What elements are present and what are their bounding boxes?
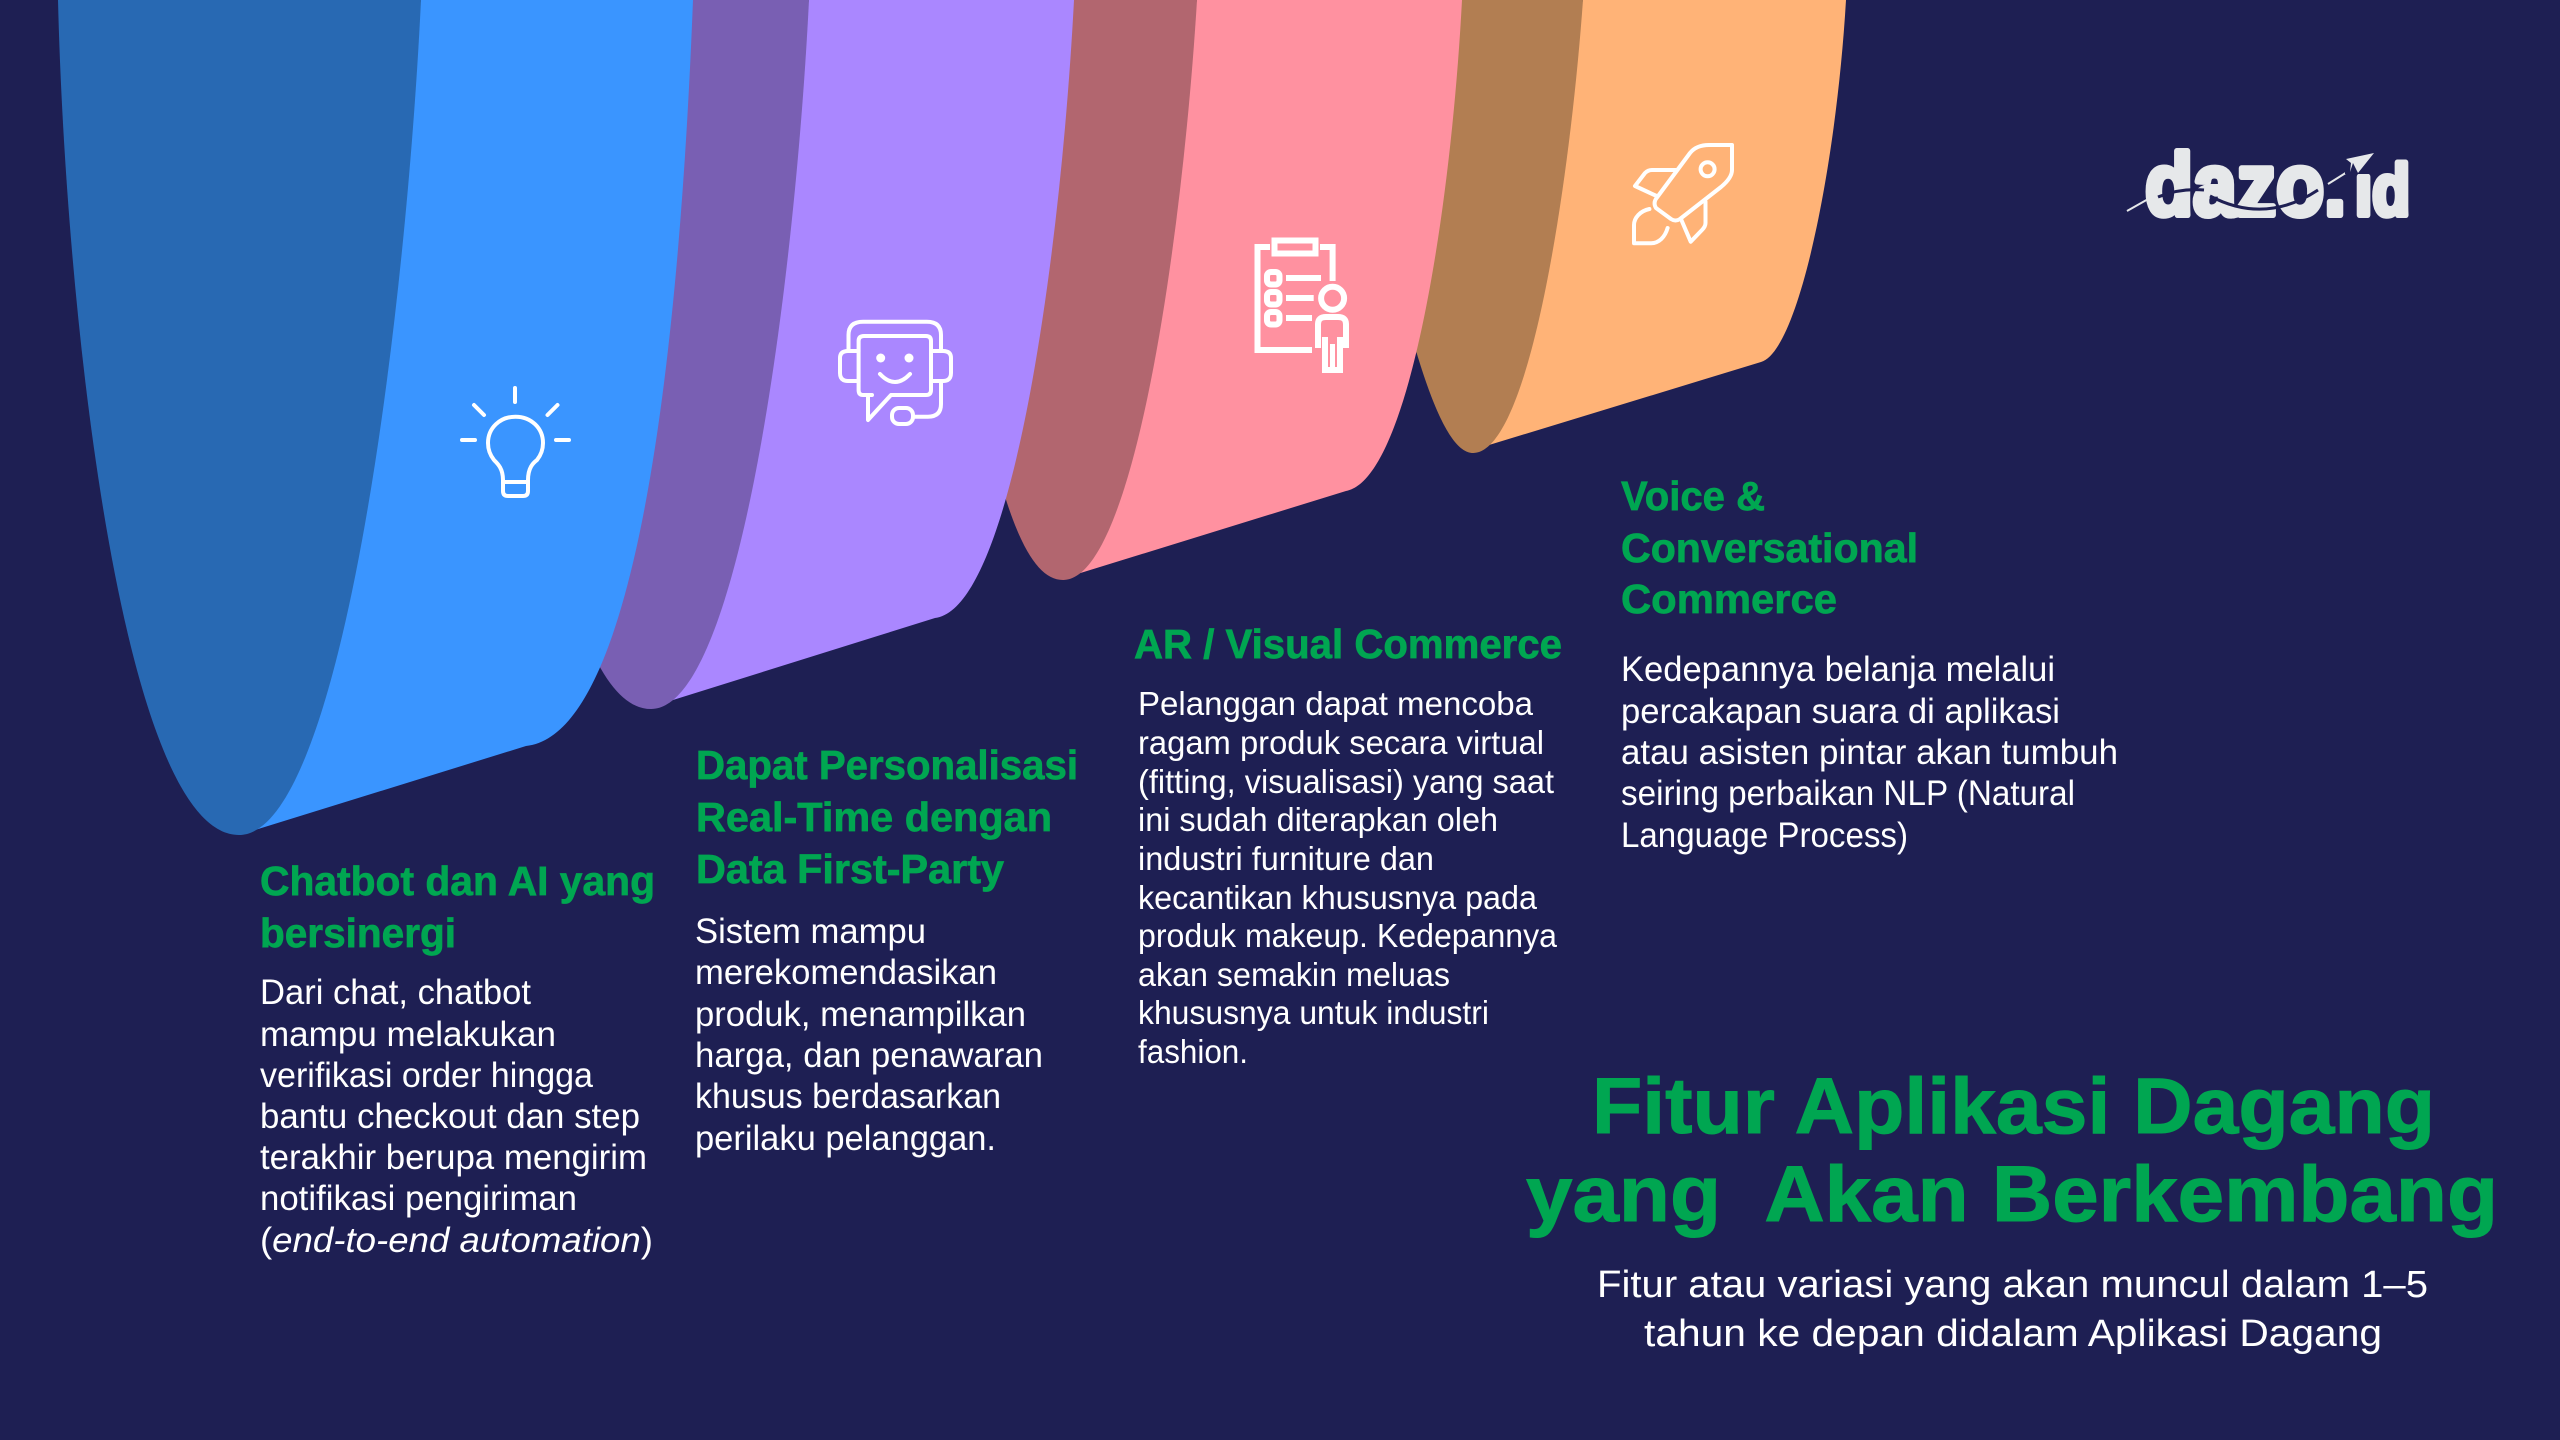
icon: rocket — [1634, 145, 1732, 243]
text block: personalisasi — [695, 742, 1078, 1158]
body: personalisasi: perilaku pelanggan. — [695, 1119, 996, 1158]
body: personalisasi: Sistem mampu — [695, 912, 926, 951]
text block: AR visual commerce — [1134, 621, 1562, 1070]
heading: voice commerce — [1621, 473, 1918, 622]
body: chatbot: verifikasi order hingga — [260, 1056, 594, 1095]
body: voice commerce: percakapan suara di aplikasi — [1621, 692, 2060, 731]
body: AR visual commerce: ini sudah diterapkan oleh — [1138, 801, 1498, 838]
subtitle: tahun ke depan didalam Aplikasi Dagang — [1644, 1313, 2382, 1355]
body: personalisasi: khusus berdasarkan — [695, 1077, 1001, 1116]
heading: personalisasi — [696, 742, 1078, 892]
body: chatbot: mampu melakukan — [260, 1015, 556, 1054]
heading: personalisasi: Data First-Party — [696, 846, 1004, 892]
body: AR visual commerce — [1138, 685, 1558, 1070]
body: chatbot — [260, 973, 653, 1260]
title: Fitur Aplikasi Dagang — [1592, 1061, 2435, 1150]
logo: dazo.id: dazo. — [2145, 135, 2346, 234]
text block: voice commerce — [1621, 473, 2118, 855]
heading: voice commerce: Commerce — [1621, 576, 1837, 622]
body: AR visual commerce: akan semakin meluas — [1138, 956, 1450, 993]
heading: personalisasi: Real-Time dengan — [696, 794, 1052, 840]
heading: chatbot: bersinergi — [260, 910, 456, 956]
heading: chatbot — [260, 858, 655, 956]
icon: chatbot with headset — [840, 322, 951, 424]
icon: light bulb — [462, 388, 569, 496]
body: AR visual commerce: kecantikan khususnya pada — [1138, 879, 1538, 916]
body: AR visual commerce: khususnya untuk industri — [1138, 994, 1489, 1031]
body: personalisasi: produk, menampilkan — [695, 995, 1026, 1034]
heading: chatbot: Chatbot dan AI yang — [260, 858, 655, 904]
body: voice commerce: seiring perbaikan NLP (Natural — [1621, 774, 2075, 813]
heading: AR visual commerce: AR / Visual Commerce — [1134, 621, 1562, 667]
body: AR visual commerce: ragam produk secara virtual — [1138, 724, 1544, 761]
body: personalisasi: merekomendasikan — [695, 953, 997, 992]
body: voice commerce: Language Process) — [1621, 816, 1908, 855]
body: voice commerce: Kedepannya belanja melalui — [1621, 650, 2055, 689]
body: AR visual commerce: fashion. — [1138, 1033, 1248, 1070]
title — [1526, 1061, 2498, 1238]
ribbon: pink — [1000, 0, 1462, 580]
subtitle — [1597, 1264, 2428, 1355]
body: chatbot: notifikasi pengiriman — [260, 1179, 577, 1218]
body: chatbot: bantu checkout dan step — [260, 1097, 640, 1136]
text block: chatbot — [260, 858, 655, 1260]
body: voice commerce — [1621, 650, 2118, 855]
ribbon: orange — [1410, 0, 1846, 453]
body: voice commerce: atau asisten pintar akan tumbuh — [1621, 733, 2118, 772]
subtitle: Fitur atau variasi yang akan muncul dalam 1–5 — [1597, 1264, 2428, 1306]
body: AR visual commerce: (fitting, visualisasi) yang saat — [1138, 763, 1554, 800]
heading: personalisasi: Dapat Personalisasi — [696, 742, 1078, 788]
body: chatbot: Dari chat, chatbot — [260, 973, 531, 1012]
body: personalisasi — [695, 912, 1043, 1158]
body: chatbot: terakhir berupa mengirim — [260, 1138, 647, 1177]
body: chatbot: (end-to-end automation ) — [260, 1221, 653, 1260]
ribbon: purple — [560, 0, 1074, 709]
title: yang Akan Berkembang — [1526, 1149, 2498, 1238]
body: AR visual commerce: industri furniture dan — [1138, 840, 1434, 877]
ribbon: blue — [58, 0, 693, 835]
icon: checklist clipboard with person — [1258, 240, 1346, 370]
body: personalisasi: harga, dan penawaran — [695, 1036, 1043, 1075]
logo: dazo.id: id — [2355, 151, 2410, 231]
heading: voice commerce: Voice & — [1621, 473, 1765, 519]
heading: voice commerce: Conversational — [1621, 525, 1918, 571]
body: AR visual commerce: produk makeup. Kedepannya — [1138, 917, 1558, 954]
body: AR visual commerce: Pelanggan dapat mencoba — [1138, 685, 1534, 722]
